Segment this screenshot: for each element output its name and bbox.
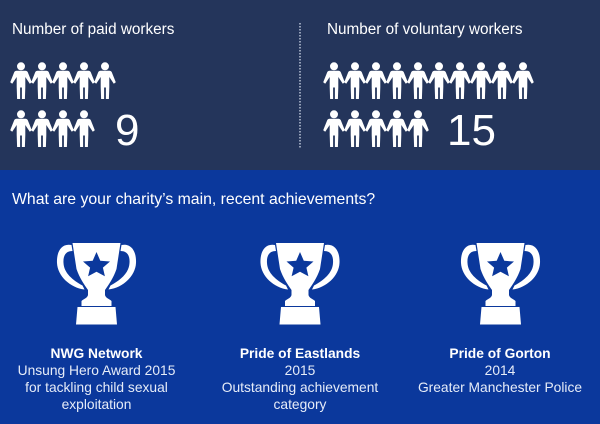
achievement: Pride of Gorton (418, 346, 582, 395)
achievement: Pride of Eastlands: Outstanding achievement (222, 380, 378, 395)
achievement: Pride of Eastlands: Pride of Eastlands (240, 346, 360, 361)
divider (299, 23, 301, 148)
panel: achievements heading: What are your charity’s main, recent achievements? (12, 191, 375, 208)
achievement: Pride of Eastlands: category (274, 397, 326, 412)
heading: voluntary workers: Number of voluntary workers (327, 21, 523, 38)
achievement: NWG Network: NWG Network (50, 346, 142, 361)
achievement: NWG Network: for tackling child sexual (25, 380, 168, 395)
panel: workers (0, 0, 600, 170)
achievement: Pride of Gorton: Pride of Gorton (449, 346, 551, 361)
heading: paid workers: Number of paid workers (12, 21, 174, 38)
icon: trophy 1 (57, 243, 136, 324)
achievement: Pride of Eastlands (222, 346, 378, 412)
number: paid workers: 9 (115, 106, 139, 155)
achievement: NWG Network (18, 346, 175, 412)
achievement: NWG Network: Unsung Hero Award 2015 (18, 363, 175, 378)
achievement: Pride of Gorton: 2014 (485, 363, 515, 378)
icon: trophy 3 (461, 243, 540, 324)
achievement: Pride of Eastlands: 2015 (285, 363, 315, 378)
achievement: Pride of Gorton: Greater Manchester Police (418, 380, 582, 395)
icons: voluntary workers (323, 62, 534, 147)
number: voluntary workers: 15 (447, 106, 496, 155)
icon: trophy 2 (260, 243, 340, 324)
achievement: NWG Network: exploitation (62, 397, 131, 412)
icons: paid workers (10, 62, 116, 147)
